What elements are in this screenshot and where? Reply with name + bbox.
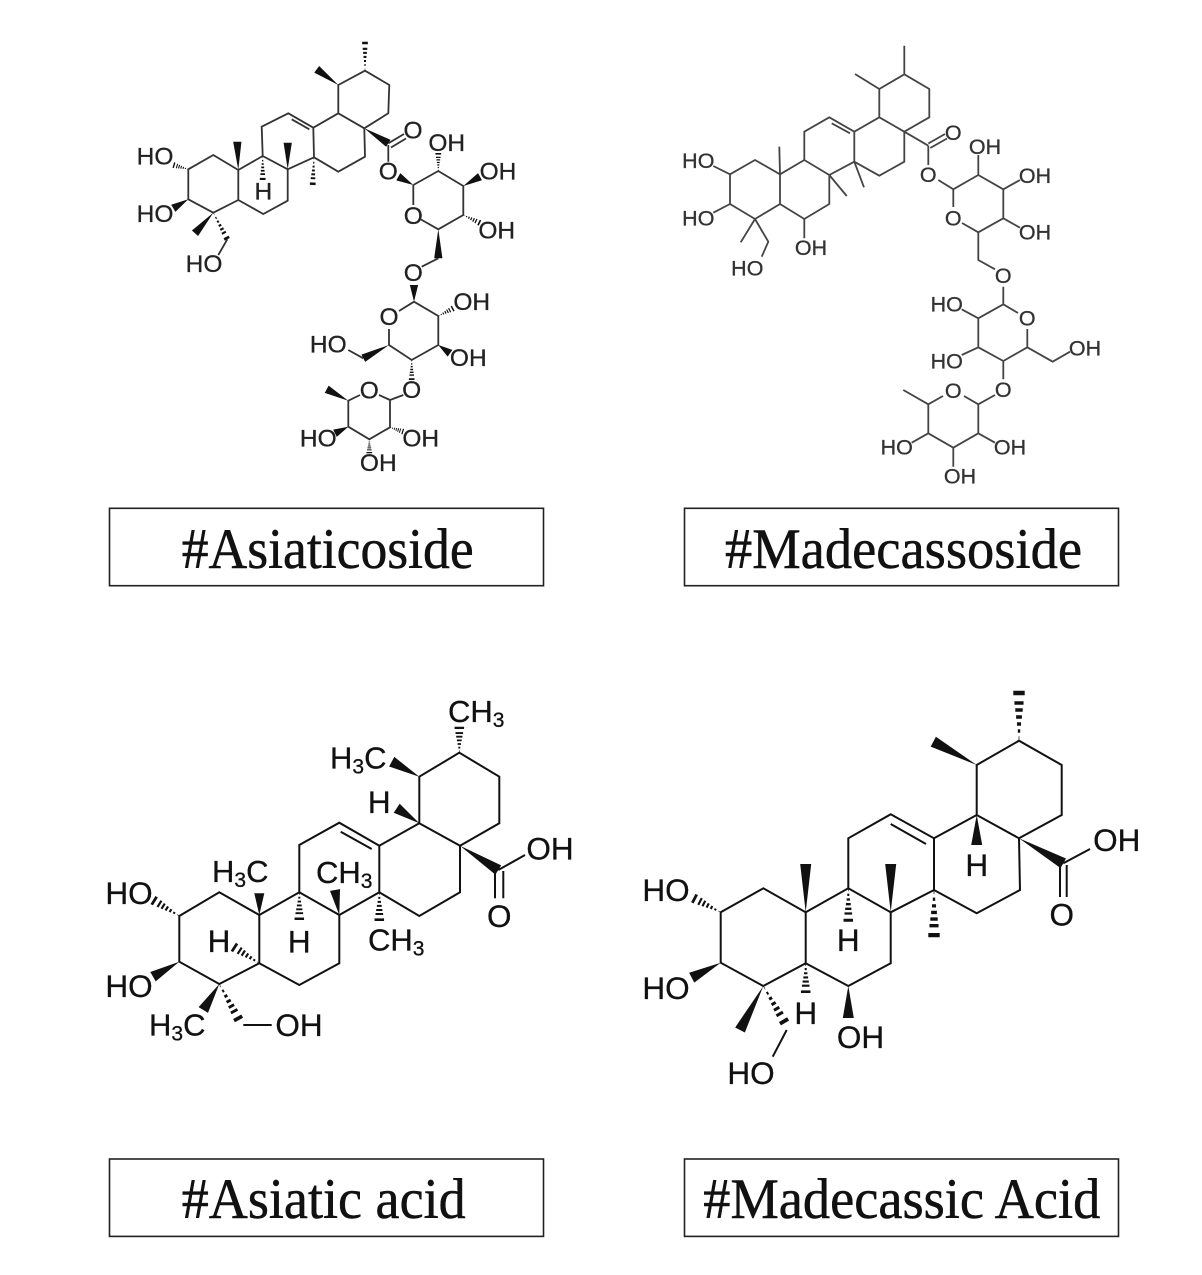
atom labels: 3: [352, 756, 364, 778]
atom labels: OH: [944, 464, 976, 488]
atom labels: 3: [234, 869, 246, 892]
atom labels: [105, 694, 574, 1046]
atom labels: HO: [727, 1055, 775, 1091]
structure: Madecassic acid: [642, 691, 1140, 1091]
atom labels: OH: [428, 130, 465, 157]
atom labels: H: [288, 924, 311, 960]
atom labels: O: [945, 379, 962, 403]
atom labels: H: [965, 847, 988, 883]
atom labels: O: [404, 260, 423, 287]
atom labels: C: [246, 854, 268, 889]
atom labels: CH: [368, 922, 413, 958]
atom labels: O: [920, 163, 937, 187]
first sugar ring: [938, 155, 1020, 269]
atom labels: C: [364, 740, 386, 776]
atom labels: CH: [448, 694, 493, 729]
atom labels: H: [208, 923, 230, 959]
atom labels: H: [212, 854, 234, 889]
atom labels: HO: [137, 201, 173, 228]
atom labels: OH: [1093, 822, 1140, 858]
atom labels: OH: [402, 426, 439, 452]
label box: Madecassic Acid: #Madecassic Acid: [703, 1168, 1100, 1231]
label box: Asiatic acid: #Asiatic acid: [182, 1168, 466, 1231]
atom labels: HO: [881, 436, 913, 460]
atom labels: HO: [310, 332, 347, 358]
atom labels: C: [183, 1008, 205, 1042]
atom labels: OH: [360, 450, 397, 477]
third sugar ring: [903, 390, 995, 467]
atom labels: O: [402, 377, 421, 404]
label box: Asiaticoside: [110, 508, 544, 586]
atom labels: HO: [931, 350, 963, 374]
stereo wedges: [150, 727, 501, 1022]
atom labels: O: [1049, 896, 1074, 932]
atom labels: 3: [413, 938, 424, 960]
atom labels: HO: [642, 872, 690, 908]
structure: Asiatic acid: [105, 694, 574, 1046]
label box: Madecassoside: #Madecassoside: [725, 518, 1082, 581]
label box: Asiatic acid: [110, 1159, 544, 1236]
atom labels: HO: [931, 292, 963, 316]
atom labels: HO: [642, 970, 690, 1006]
atom labels: H: [837, 922, 860, 958]
second sugar ring: [348, 302, 438, 360]
third sugar ring: [348, 395, 403, 439]
atom labels: H: [330, 740, 352, 776]
structure: Asiaticoside: [137, 42, 516, 477]
atom labels: OH: [526, 830, 574, 866]
atom labels: OH: [275, 1007, 323, 1043]
atom labels: HO: [300, 426, 337, 452]
atom labels: OH: [837, 1019, 884, 1055]
atom labels: O: [379, 158, 398, 186]
atom labels: OH: [480, 158, 516, 186]
atom labels: O: [945, 121, 962, 145]
aglycone ring skeleton: [713, 46, 947, 257]
stereo wedges: [689, 691, 1066, 1033]
atom labels: HO: [682, 206, 714, 230]
atom labels: H: [149, 1008, 171, 1042]
atom labels: OH: [795, 236, 827, 260]
atom labels: HO: [682, 149, 714, 173]
atom labels: OH: [1019, 220, 1051, 244]
atom labels: 3: [171, 1022, 183, 1046]
atom labels: OH: [969, 135, 1001, 159]
atom labels: O: [404, 203, 423, 230]
atom labels: H: [254, 178, 272, 206]
atom labels: [137, 118, 516, 477]
atom labels: O: [995, 264, 1012, 288]
atom labels: HO: [105, 875, 153, 911]
atom labels: OH: [1019, 164, 1051, 188]
stereo wedges: [171, 42, 482, 453]
atom labels: O: [379, 304, 399, 331]
atom labels: OH: [453, 289, 490, 316]
aglycone ring skeleton: [188, 71, 406, 255]
atom labels: 3: [493, 709, 504, 732]
atom labels: O: [995, 378, 1012, 402]
atom labels: O: [487, 898, 512, 934]
atom labels: OH: [450, 345, 487, 372]
atom labels: O: [1019, 306, 1036, 330]
atom labels: CH: [316, 855, 361, 890]
atom labels: OH: [994, 436, 1026, 460]
first sugar ring: [413, 171, 463, 267]
atom labels: OH: [1069, 336, 1101, 360]
atom labels: H: [794, 995, 817, 1031]
ring skeleton: [179, 753, 525, 1025]
atom labels: O: [945, 206, 962, 230]
atom labels: O: [360, 378, 379, 404]
atom labels: HO: [137, 144, 173, 170]
atom labels: [642, 822, 1140, 1091]
structure: Madecassoside: [682, 46, 1101, 488]
atom labels: HO: [186, 251, 222, 278]
atom labels: OH: [478, 218, 515, 244]
label box: Asiaticoside: #Asiaticoside: [182, 518, 474, 581]
second sugar ring: [962, 287, 1070, 379]
atom labels: HO: [731, 256, 763, 280]
atom labels: 3: [361, 870, 372, 893]
atom labels: [682, 121, 1101, 488]
atom labels: O: [403, 118, 423, 144]
atom labels: H: [368, 784, 391, 820]
ring skeleton: [721, 741, 1090, 1057]
atom labels: HO: [105, 968, 153, 1004]
